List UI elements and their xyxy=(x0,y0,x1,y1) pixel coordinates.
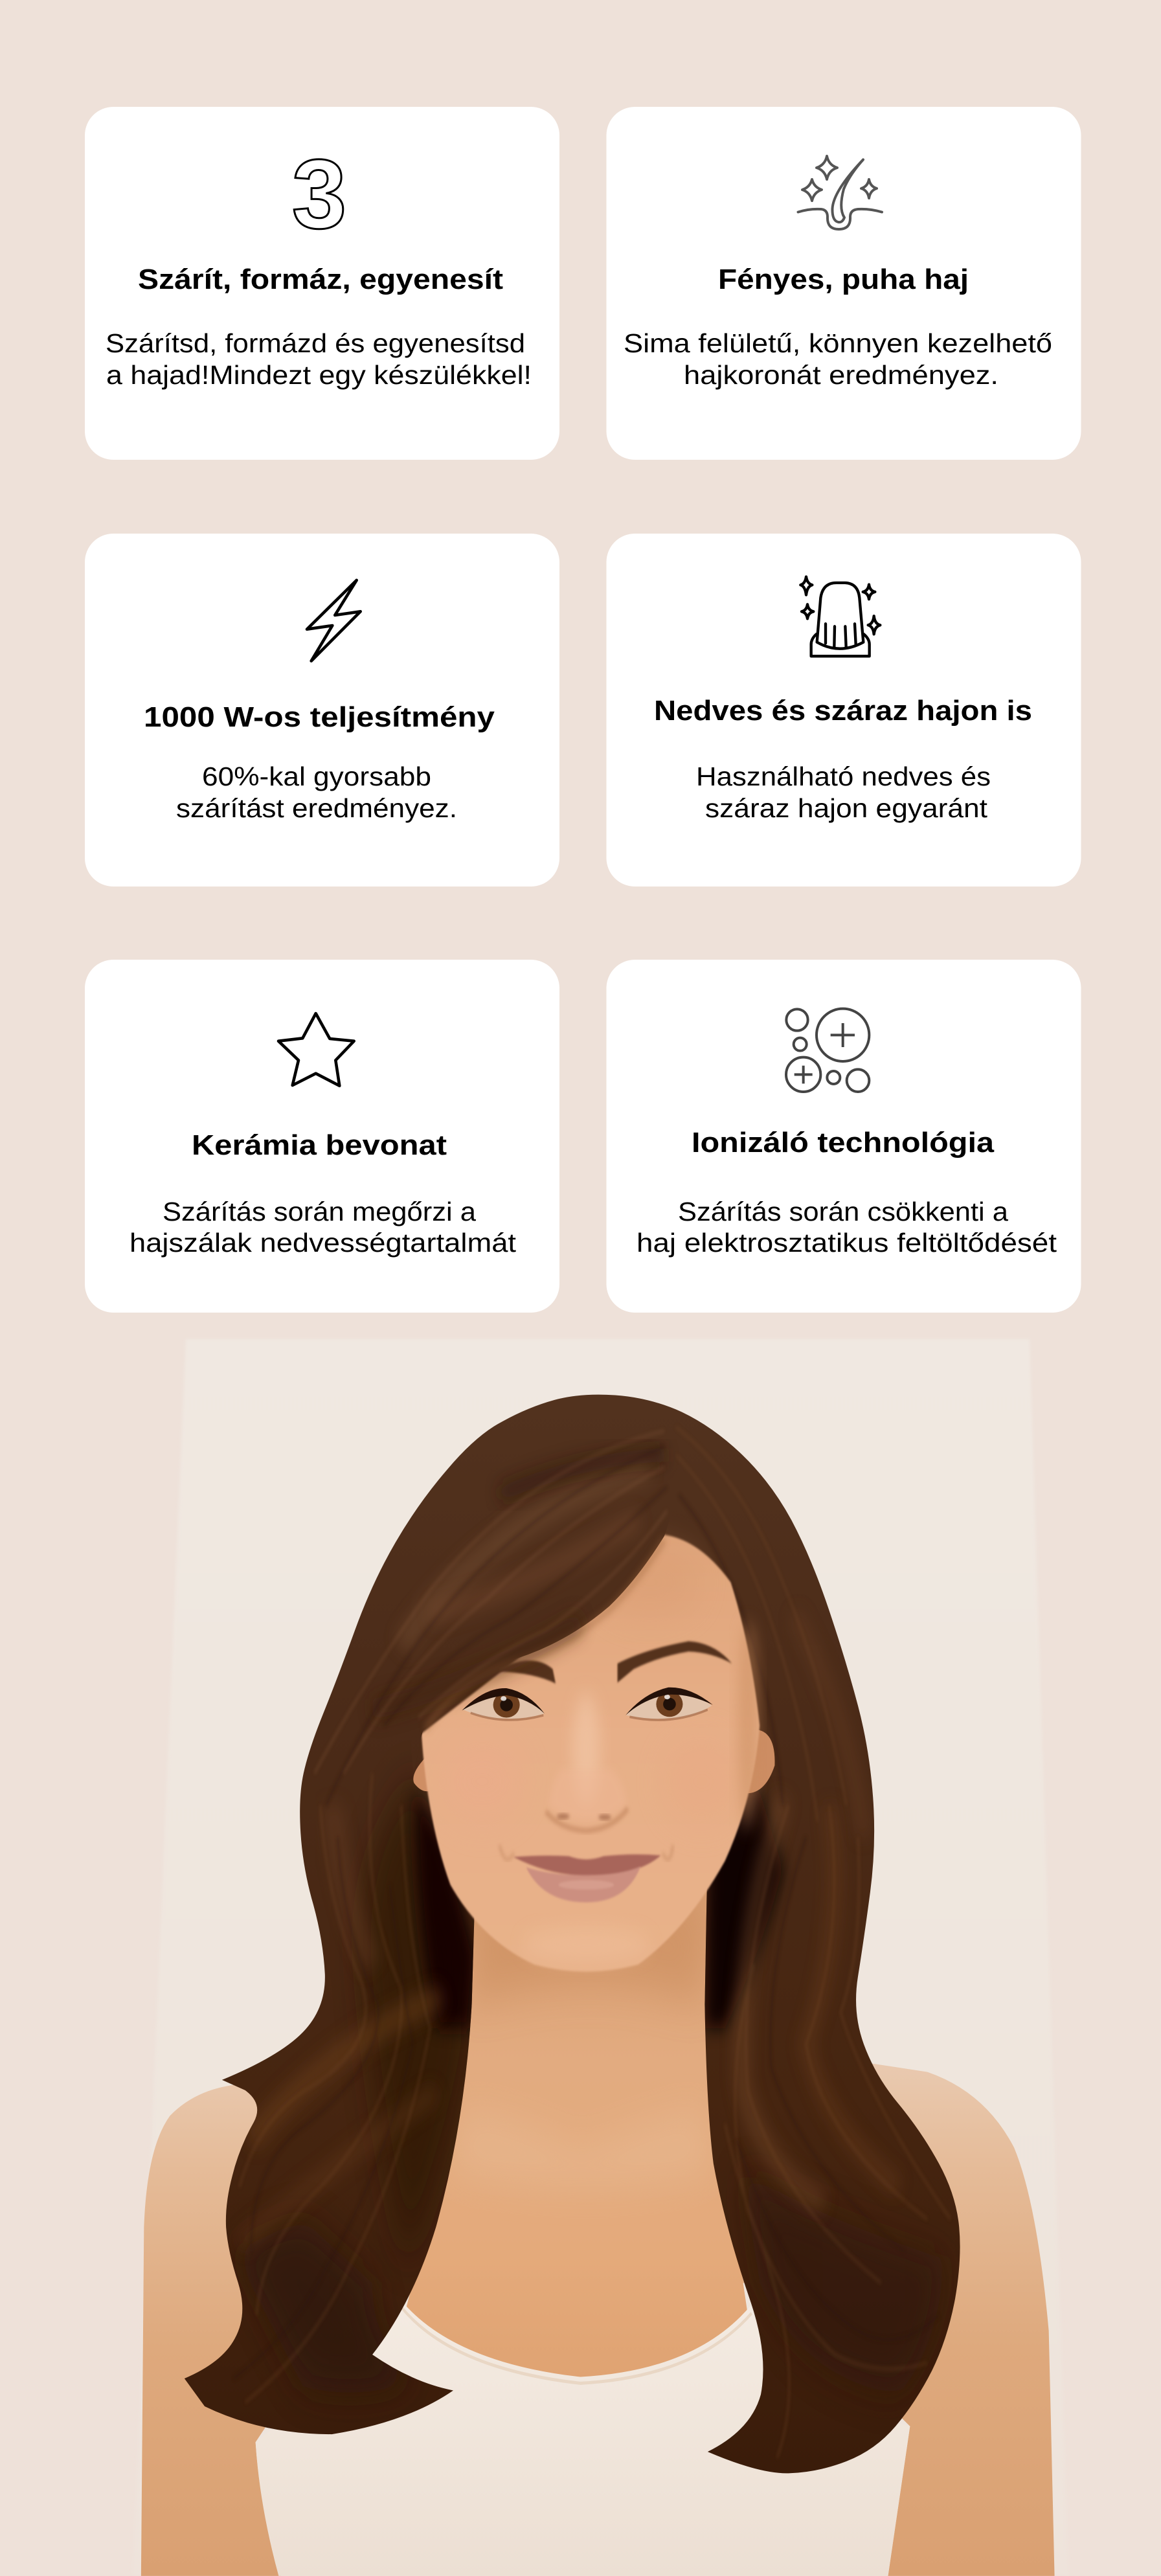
text block: card 4 description: száraz hajon egyaránt xyxy=(705,793,988,823)
hair silhouette xyxy=(185,1395,960,2473)
face xyxy=(422,1535,760,1972)
icon: star xyxy=(278,1013,354,1086)
ears xyxy=(413,1730,775,1793)
hairline shadow on forehead xyxy=(425,1539,664,1729)
text block: card 5 description: hajszálak nedvességtartalmát xyxy=(130,1228,517,1258)
tank top xyxy=(256,2301,910,2576)
neck shadow xyxy=(471,1901,708,2004)
icon: outlined number 3: 3 xyxy=(292,139,346,249)
text block: card 2 description: Sima felületű, könnyen kezelhető xyxy=(624,328,1052,358)
text block: card 3 description: szárítást eredményez. xyxy=(176,793,457,823)
side-swept bangs xyxy=(401,1419,675,1774)
heading: 1000 W-os teljesítmény: 1000 W-os teljesítmény xyxy=(144,701,495,733)
shoulders and arms xyxy=(141,2044,1055,2576)
panel: 1000 W card xyxy=(85,534,559,887)
icon: hair strand with sparkles xyxy=(798,156,882,229)
text block: card 1 description: Szárítsd, formázd és egyenesítsd xyxy=(106,328,525,358)
eyebrows xyxy=(499,1641,732,1684)
face shading xyxy=(439,1550,758,1962)
icon: lightning bolt xyxy=(307,580,361,661)
heading: Ionizáló technológia: Ionizáló technológia xyxy=(692,1127,995,1158)
icon: hair head with sparkles xyxy=(800,577,880,656)
panel: shiny soft hair card xyxy=(606,107,1081,460)
collarbone highlight xyxy=(447,2108,714,2187)
text block: card 2 description: hajkoronát eredményez. xyxy=(684,360,998,390)
text block: card 6 description xyxy=(637,1197,1057,1258)
heading: Fényes, puha haj: Fényes, puha haj xyxy=(718,264,969,295)
text block: card 1 description xyxy=(106,328,532,390)
heading: Szárít, formáz, egyenesít: Szárít, formáz, egyenesít xyxy=(138,264,503,295)
lips xyxy=(513,1855,661,1903)
text block: card 1 description: a hajad!Mindezt egy készülékkel! xyxy=(106,360,532,390)
illustration: smiling woman with long straight brown hair xyxy=(141,1395,1055,2576)
text block: card 3 description xyxy=(176,762,457,823)
panel: ionizing technology card xyxy=(606,960,1081,1313)
panel: wet and dry hair card xyxy=(606,534,1081,887)
text block: card 4 description: Használható nedves és xyxy=(696,762,991,791)
text block: card 5 description xyxy=(130,1197,517,1258)
text block: card 5 description: Szárítás során megőrzi a xyxy=(163,1197,476,1226)
neck and chest xyxy=(384,1837,760,2395)
text block: card 2 description xyxy=(624,328,1052,390)
heading: Nedves és száraz hajon is: Nedves és száraz hajon is xyxy=(654,695,1032,727)
icon: ions xyxy=(786,1009,869,1092)
heading: Kerámia bevonat: Kerámia bevonat xyxy=(192,1129,447,1161)
panel: ceramic coating card xyxy=(85,960,559,1313)
hair shading and fine strands xyxy=(241,1520,948,2457)
bangs highlights xyxy=(315,1431,667,1805)
text block: card 3 description: 60%-kal gyorsabb xyxy=(202,762,431,791)
panel: 3-in-1 card xyxy=(85,107,559,460)
text block: card 6 description: Szárítás során csökkenti a xyxy=(678,1197,1008,1226)
eyes xyxy=(462,1688,713,1720)
text block: card 6 description: haj elektrosztatikus feltöltődését xyxy=(637,1228,1057,1258)
nose xyxy=(546,1769,628,1831)
lighter photo backdrop xyxy=(133,1339,1068,2576)
text block: card 4 description xyxy=(696,762,991,823)
